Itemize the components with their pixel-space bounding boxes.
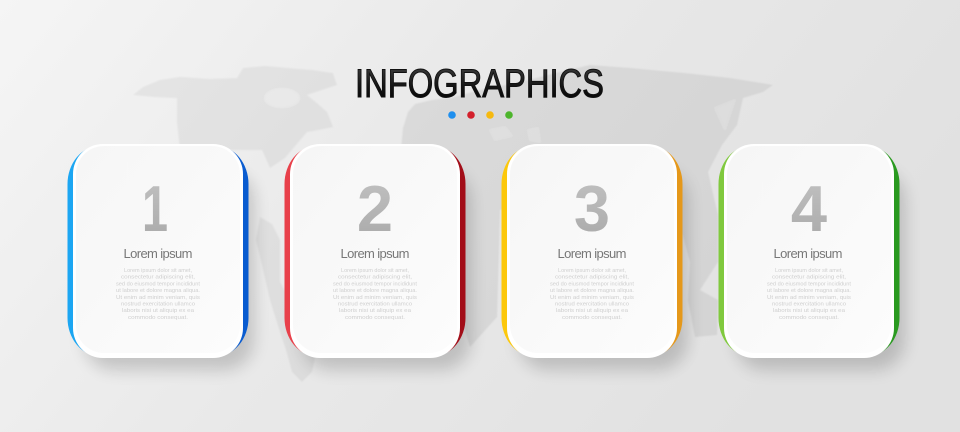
body text 1: commodo consequat.: [128, 315, 189, 321]
body text 1: Ut enim ad minim veniam, quis: [116, 295, 200, 301]
title: INFOGRAPHICS: [355, 62, 604, 106]
body text 4: nostrud exercitation ullamco: [772, 302, 846, 308]
body text 3: nostrud exercitation ullamco: [555, 302, 629, 308]
body text 2: consectetur adipiscing elit,: [338, 275, 413, 281]
number 2: 2: [357, 172, 393, 245]
colored dots: [448, 111, 513, 119]
heading 3: Lorem ipsum: [558, 246, 626, 261]
body text 4: commodo consequat.: [779, 315, 840, 321]
body text 3: ut labore et dolore magna aliqua.: [550, 288, 634, 294]
body text 2: Ut enim ad minim veniam, quis: [333, 295, 417, 301]
body text 2: Lorem ipsum dolor sit amet,: [341, 268, 409, 274]
body text 4: sed do eiusmod tempor incididunt: [767, 281, 851, 287]
panel: step 1: [68, 144, 254, 370]
heading 2: Lorem ipsum: [340, 246, 410, 261]
body text 3: consectetur adipiscing elit,: [555, 275, 630, 281]
body text 3: Lorem ipsum dolor sit amet,: [558, 268, 626, 274]
number 1: 1: [142, 172, 168, 245]
panel: step 4: [718, 144, 905, 370]
world map: [133, 65, 773, 382]
body text 1: [116, 268, 200, 321]
body text 3: commodo consequat.: [562, 315, 623, 321]
body text 4: Lorem ipsum dolor sit amet,: [775, 268, 843, 274]
heading 1: Lorem ipsum: [124, 246, 192, 261]
body text 2: [333, 268, 417, 321]
body text 4: Ut enim ad minim veniam, quis: [767, 295, 851, 301]
body text 2: ut labore et dolore magna aliqua.: [333, 288, 417, 294]
body text 1: consectetur adipiscing elit,: [121, 275, 196, 281]
body text 4: laboris nisi ut aliquip ex ea: [773, 308, 846, 314]
body text 4: ut labore et dolore magna aliqua.: [767, 288, 851, 294]
number 4: 4: [791, 172, 827, 245]
body text 1: sed do eiusmod tempor incididunt: [116, 281, 200, 287]
body text 3: Ut enim ad minim veniam, quis: [550, 295, 634, 301]
body text 1: Lorem ipsum dolor sit amet,: [124, 268, 192, 274]
body text 2: nostrud exercitation ullamco: [338, 302, 412, 308]
body text 4: [767, 268, 851, 321]
heading 4: Lorem ipsum: [774, 246, 842, 261]
body text 1: ut labore et dolore magna aliqua.: [116, 288, 200, 294]
body text 3: laboris nisi ut aliquip ex ea: [556, 308, 629, 314]
body text 4: consectetur adipiscing elit,: [772, 275, 847, 281]
body text 2: sed do eiusmod tempor incididunt: [333, 281, 417, 287]
body text 1: laboris nisi ut aliquip ex ea: [122, 308, 195, 314]
body text 1: nostrud exercitation ullamco: [121, 302, 195, 308]
panel: step 2: [284, 144, 471, 370]
number 3: 3: [574, 172, 610, 245]
body text 2: commodo consequat.: [345, 315, 406, 321]
body text 3: sed do eiusmod tempor incididunt: [550, 281, 634, 287]
body text 2: laboris nisi ut aliquip ex ea: [339, 308, 412, 314]
body text 3: [550, 268, 634, 321]
panel: step 3: [502, 144, 688, 370]
